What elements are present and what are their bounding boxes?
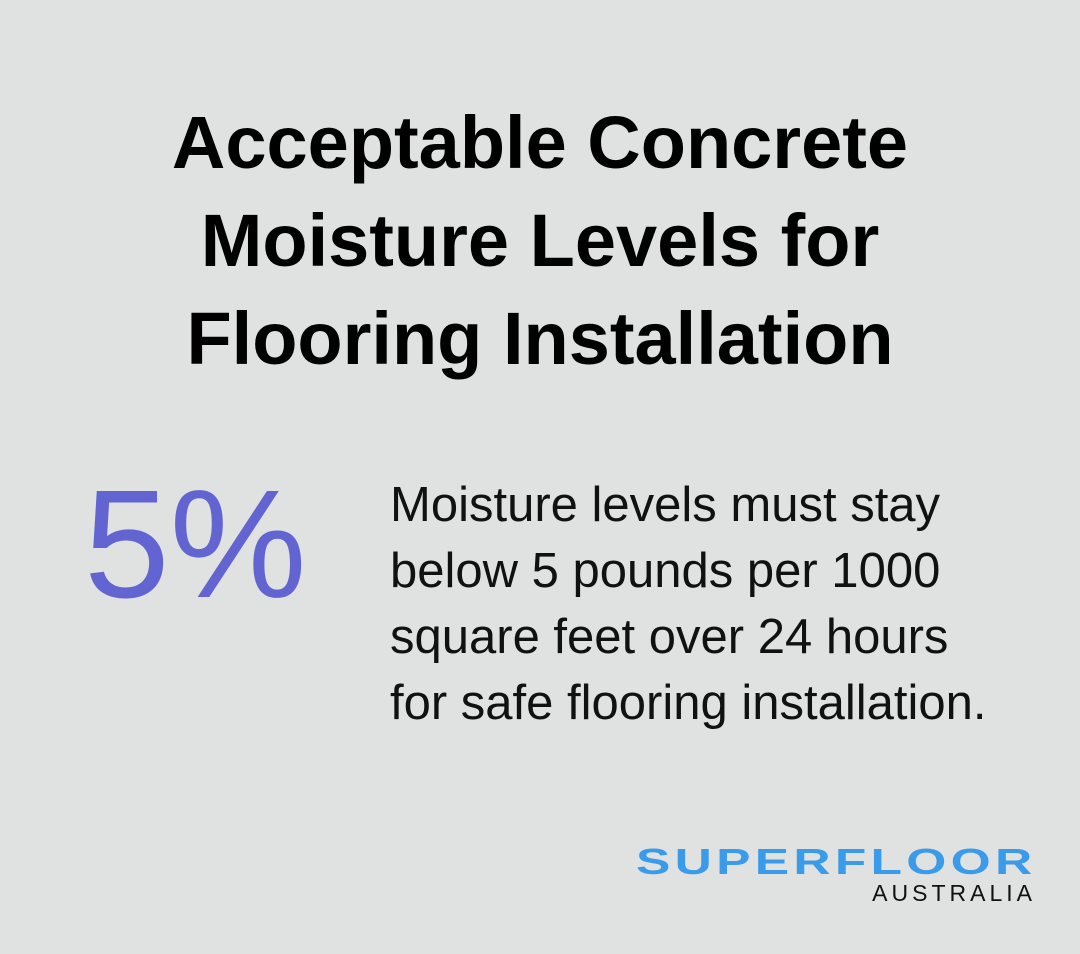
title: Flooring Installation xyxy=(186,297,894,380)
title: Acceptable Concrete xyxy=(172,101,908,184)
stat description text: for safe flooring installation. xyxy=(390,676,986,730)
stat description text: below 5 pounds per 1000 xyxy=(390,544,940,598)
stat description text: square feet over 24 hours xyxy=(390,610,948,664)
logo: Superfloor Australia xyxy=(636,841,1036,906)
title xyxy=(172,101,908,380)
stat description text: Moisture levels must stay xyxy=(390,478,940,532)
title: Moisture Levels for xyxy=(201,199,879,282)
big stat: 5%: 5% xyxy=(84,458,307,630)
logo wordmark: SUPERFLOOR xyxy=(636,841,1036,882)
logo subtitle: AUSTRALIA xyxy=(872,880,1036,906)
stat description text xyxy=(390,478,986,730)
